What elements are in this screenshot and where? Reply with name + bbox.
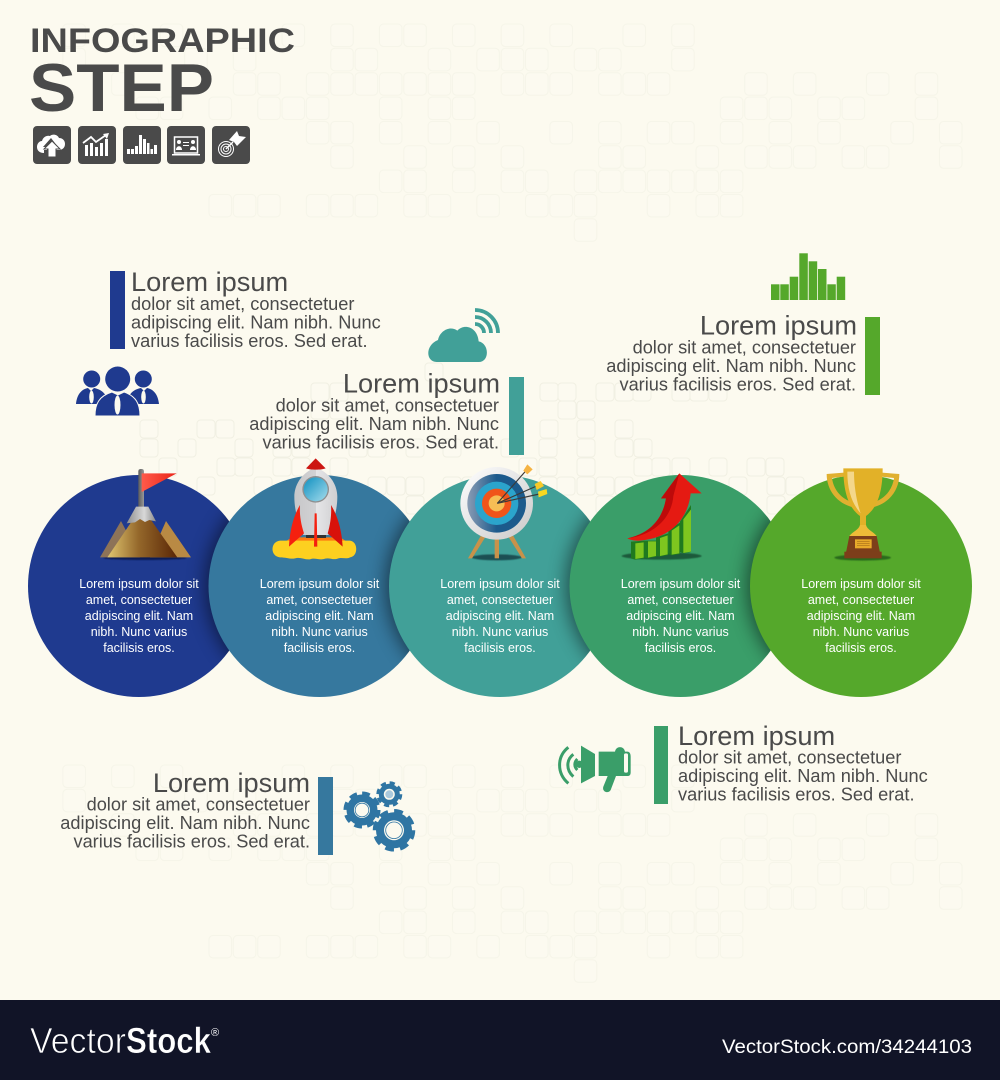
icon: target arrow — [212, 126, 250, 164]
circle 1: mountain step: amet, consectetuer — [86, 593, 192, 607]
icon: wifi cloud — [428, 310, 498, 362]
text block: top left: varius facilisis eros. Sed erat. — [131, 331, 368, 351]
icon: growth chart — [78, 126, 116, 164]
icon: mountain with flag — [100, 469, 191, 560]
text block: bottom left: varius facilisis eros. Sed erat. — [73, 832, 310, 852]
circle 5: trophy step: nibh. Nunc varius — [813, 625, 909, 639]
text block: center: varius facilisis eros. Sed erat. — [262, 432, 499, 452]
icon: target with arrows — [460, 464, 547, 560]
circle 4: growth step: facilisis eros. — [645, 641, 716, 655]
gear: left — [346, 794, 378, 826]
step circles — [28, 475, 972, 697]
icon row: five dark square icons — [33, 126, 250, 164]
circle 2: rocket step: amet, consectetuer — [266, 593, 373, 607]
text block: top right — [606, 310, 880, 395]
text block: top left: adipiscing elit. Nam nibh. Nunc — [131, 312, 381, 332]
footer logo — [30, 1020, 219, 1061]
text block: bottom left — [60, 767, 333, 855]
circle 4: growth step: Lorem ipsum dolor sit — [621, 577, 741, 591]
text block: top left: dolor sit amet, consectetuer — [131, 294, 354, 314]
circle 3: target step: Lorem ipsum dolor sit — [440, 577, 560, 591]
icon: gears — [346, 783, 412, 849]
circle 1: mountain step: facilisis eros. — [103, 641, 175, 655]
icon: green bar chart — [771, 253, 845, 300]
circle 5: trophy step: amet, consectetuer — [808, 593, 914, 607]
footer image id: VectorStock.com/34244103 — [722, 1037, 972, 1058]
footer logo: Vector — [30, 1020, 126, 1061]
title: INFOGRAPHIC — [30, 22, 295, 60]
circle 5: trophy step: Lorem ipsum dolor sit — [801, 577, 921, 591]
text block: top right: dolor sit amet, consectetuer — [633, 338, 856, 358]
text block: center: adipiscing elit. Nam nibh. Nunc — [249, 414, 499, 434]
text block: bottom left: dolor sit amet, consectetuer — [87, 794, 310, 814]
text block: top left: Lorem ipsum — [131, 266, 288, 297]
text block: center — [249, 368, 524, 455]
circle 3: target step: facilisis eros. — [464, 641, 536, 655]
text block: top right: adipiscing elit. Nam nibh. Nunc — [606, 356, 856, 376]
text block: bottom right — [654, 720, 928, 804]
icon: people — [76, 366, 159, 416]
text block: top left — [110, 266, 381, 351]
circle 1: mountain step: Lorem ipsum dolor sit — [79, 577, 199, 591]
text block: bottom right: dolor sit amet, consectetuer — [678, 748, 901, 768]
title: STEP — [29, 50, 214, 126]
circle 2: rocket step: nibh. Nunc varius — [271, 625, 368, 639]
text block: top right: Lorem ipsum — [700, 310, 857, 341]
icon: trophy — [827, 468, 899, 561]
footer bar — [0, 1000, 1000, 1080]
text block: bottom right: varius facilisis eros. Sed erat. — [678, 784, 915, 804]
gear: large bottom — [376, 812, 412, 849]
text block: bottom left: adipiscing elit. Nam nibh. Nunc — [60, 813, 310, 833]
text block: top right: varius facilisis eros. Sed erat. — [619, 374, 856, 394]
circle 2: rocket step: facilisis eros. — [284, 641, 355, 655]
circle 3: target step: amet, consectetuer — [447, 593, 553, 607]
circle 4: growth step: amet, consectetuer — [627, 593, 734, 607]
text block: center: Lorem ipsum — [343, 368, 500, 398]
circle 3: target step: nibh. Nunc varius — [452, 625, 548, 639]
icon: growth arrow over bars — [622, 473, 702, 560]
circle 3: target step — [389, 477, 590, 697]
icon: bar chart — [123, 126, 161, 164]
text block: bottom left: Lorem ipsum — [153, 767, 310, 798]
footer logo: ® — [211, 1027, 219, 1039]
icon: megaphone — [560, 746, 631, 792]
circle 1: mountain step: nibh. Nunc varius — [91, 625, 187, 639]
circle 2: rocket step: Lorem ipsum dolor sit — [260, 577, 380, 591]
text block: bottom right: adipiscing elit. Nam nibh. Nunc — [678, 766, 928, 786]
icon: cloud upload — [33, 126, 71, 164]
icon: laptop video call — [167, 126, 205, 164]
circle 5: trophy step — [750, 475, 972, 697]
circle 4: growth step: nibh. Nunc varius — [632, 625, 729, 639]
circle 2: rocket step — [208, 475, 410, 697]
circle 5: trophy step: facilisis eros. — [825, 641, 897, 655]
circle 4: growth step: adipiscing elit. Nam — [626, 609, 735, 623]
circle 3: target step: adipiscing elit. Nam — [446, 609, 554, 623]
circle 1: mountain step: adipiscing elit. Nam — [85, 609, 193, 623]
gear: small top — [378, 783, 400, 805]
text block: center: dolor sit amet, consectetuer — [276, 396, 499, 416]
circle 5: trophy step: adipiscing elit. Nam — [807, 609, 915, 623]
circle 1: mountain step — [28, 475, 230, 697]
footer logo: Stock — [126, 1020, 212, 1061]
icon: rocket — [272, 458, 356, 559]
circle 4: growth step — [570, 475, 771, 697]
circle 2: rocket step: adipiscing elit. Nam — [265, 609, 374, 623]
title — [29, 22, 295, 126]
text block: bottom right: Lorem ipsum — [678, 720, 835, 751]
